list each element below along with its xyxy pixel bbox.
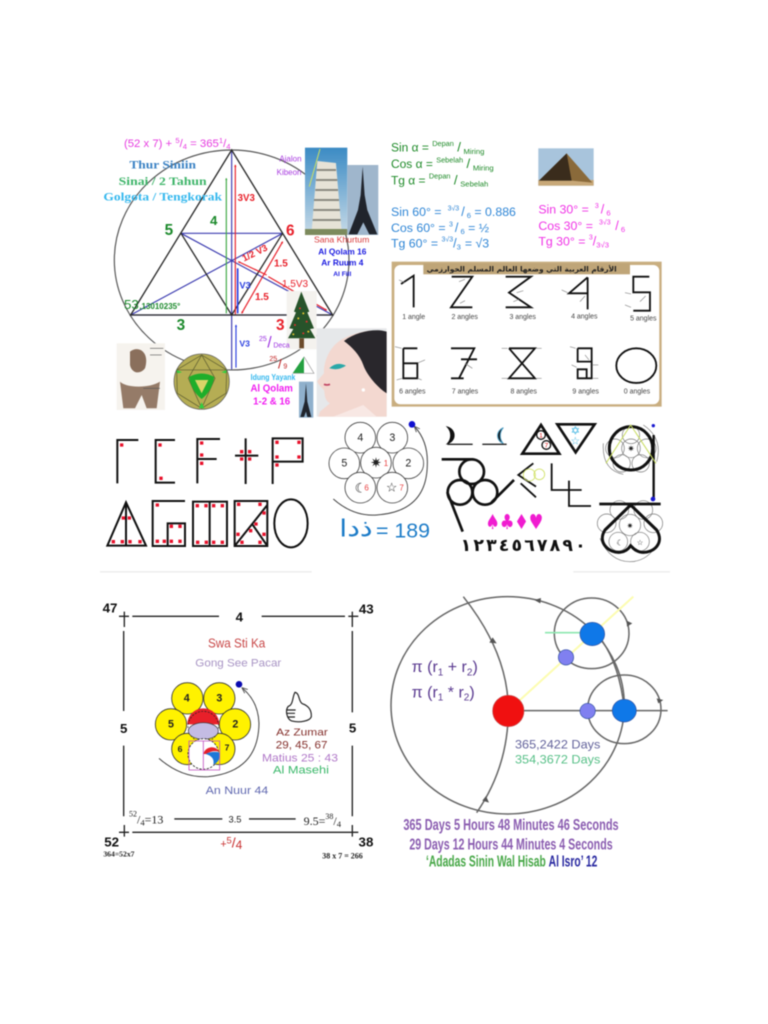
bottom formulas: =13	[145, 813, 163, 827]
text block: 60 degree values: Tg 60° =	[391, 236, 438, 250]
text block: 30 degree values: Cos 30° =	[538, 219, 593, 233]
labels: numbers on triangle: 4	[210, 213, 218, 228]
square frame	[119, 612, 358, 837]
heading: formula: /	[180, 138, 184, 150]
labels: numbers on triangle: 53	[124, 297, 139, 312]
bottom formulas: 38	[325, 812, 333, 821]
digit captions: 3 angles	[509, 314, 536, 321]
digit captions: 5 angles	[630, 316, 657, 323]
text block: 30 degree values: /	[593, 234, 597, 248]
bottom formulas: 364=52x7	[103, 850, 135, 859]
heading: formula: 1	[219, 136, 223, 145]
panel: orbital diagram	[391, 597, 668, 871]
text block: Deca fractions: /	[278, 356, 282, 371]
image: Christmas tree	[287, 291, 317, 349]
text block: Swa Sti Ka: Gong See Pacar	[195, 657, 282, 669]
labels: numbers on triangle: 1.5	[255, 292, 269, 303]
text block: green definitions: Depan	[429, 172, 451, 181]
heading: formula: /	[223, 138, 227, 150]
bottom formulas: 4	[236, 838, 243, 852]
text block: green definitions: Sebelah	[460, 180, 488, 189]
flower numbers: 1	[384, 459, 389, 468]
divider	[100, 571, 312, 573]
text block: durations: ‘Adadas Sinin Wal Hisab Al Isro’ 12	[426, 854, 597, 871]
measurement arrows	[226, 165, 327, 368]
flower numbers: 3	[216, 693, 222, 705]
chart title band: الأرقام العربية التي وضعها العالم المسلم الخوارزمي	[427, 264, 617, 273]
heading: formula: 4	[226, 142, 231, 151]
labels: numbers on triangle: 6	[286, 223, 295, 240]
flower numbers: 4	[184, 693, 190, 705]
flower numbers: ☆	[386, 481, 397, 495]
icon: triangles with symbols: ☆	[571, 434, 580, 447]
text block: Sana Khurtum: Al Fill	[333, 271, 352, 278]
formula text: pi: π (r	[412, 684, 438, 701]
corner and side numbers: 47	[103, 600, 117, 615]
text block: 60 degree values: /	[453, 236, 457, 250]
icon: triangles with symbols: 7	[544, 443, 548, 450]
formula text: pi: 1	[438, 667, 444, 678]
text block: Az Zumar, Matius, Al Masehi	[262, 728, 338, 777]
text block: Ajalon Kibeon: Ajalon	[279, 155, 302, 164]
text block: 60 degree values: Sin 60° =	[391, 205, 442, 219]
planets	[558, 622, 636, 722]
panel: trigonometry formulas	[391, 139, 662, 407]
corner and side numbers	[103, 600, 374, 849]
red dots	[112, 441, 301, 544]
text block: green definitions: Sin α =	[391, 141, 429, 155]
text block: 30 degree values: Sin 30° =	[538, 203, 589, 217]
text block: 30 degree values: Tg 30° =	[538, 234, 585, 248]
seal: heart shape	[597, 501, 663, 562]
formula text: pi: + r	[443, 659, 468, 676]
flower numbers: 7	[399, 483, 404, 492]
icon: seven-like circles glyph	[442, 459, 591, 532]
blue construction lines	[131, 150, 333, 369]
text block: 30 degree values: /	[615, 219, 619, 233]
digit captions: 8 angles	[510, 389, 537, 396]
text: An Nuur 44: An Nuur 44	[206, 785, 268, 797]
text block: green definitions: /	[466, 156, 470, 171]
orbits and lines	[391, 597, 668, 814]
text block: Idung Yayank Al Qolam: Al Qolam	[250, 384, 293, 395]
icon: crescent moons	[447, 427, 507, 444]
bottom formulas: 5	[227, 836, 232, 846]
text block: durations: 365 Days 5 Hours 48 Minutes 46 Seconds	[403, 817, 619, 834]
seal: heart shape: ☾	[616, 539, 624, 548]
panel: triangle in circle diagram	[103, 136, 387, 418]
circumscribed circle	[114, 150, 349, 370]
black triangle	[131, 150, 333, 315]
text block: Deca fractions: Deca	[273, 343, 290, 350]
digit glyphs	[401, 276, 656, 383]
bottom formulas	[103, 810, 363, 860]
formula: 189: = 189	[376, 519, 430, 542]
flower numbers: 2	[405, 458, 411, 470]
text block: green definitions: Tg α =	[391, 173, 426, 187]
icon: triangles with symbols: 1	[539, 433, 543, 440]
text block: Thur Sinin: Sinai / 2 Tahun	[119, 176, 207, 188]
formula text: pi: * r	[443, 684, 464, 701]
heading: formula: = 365	[187, 138, 219, 150]
text block: Deca fractions: 9	[283, 363, 287, 370]
icon: card suits: ♠♣♦♥	[485, 510, 543, 534]
text block: 30 degree values	[538, 203, 625, 249]
text block: Idung Yayank Al Qolam: Idung Yayank	[251, 373, 296, 382]
formula text: pi: 1	[438, 693, 444, 704]
text block: 30 degree values: 6	[621, 225, 625, 234]
text block: 30 degree values: 3	[589, 235, 593, 242]
text block: 60 degree values: = 0.886	[471, 205, 516, 219]
text block: Idung Yayank Al Qolam: 1-2 & 16	[253, 396, 291, 407]
icon: triangles with symbols	[522, 423, 595, 454]
text block: Idung Yayank Al Qolam	[250, 373, 296, 407]
text block: Az Zumar, Matius, Al Masehi: 29, 45, 67	[276, 739, 328, 751]
chart title band	[423, 263, 630, 274]
digit captions: 9 angles	[572, 389, 599, 396]
text block: 60 degree values: 6	[467, 211, 471, 220]
labels: numbers on triangle: ,13010235°	[139, 302, 180, 311]
labels: numbers on triangle: 1/2 V3	[240, 243, 269, 263]
text block: green definitions: Miring	[464, 147, 484, 156]
text block: Swa Sti Ka	[195, 637, 282, 669]
flower numbers: 6	[178, 744, 183, 754]
image: anatomy sketch	[117, 343, 165, 410]
flower of yellow circles	[155, 683, 251, 770]
flower numbers: 6	[364, 483, 369, 492]
text block: green definitions: Depan	[432, 139, 454, 148]
alignment lines	[508, 597, 633, 711]
text block: green definitions: Miring	[473, 163, 494, 172]
seal: nine shape	[603, 424, 658, 501]
formula text: pi: )	[472, 659, 478, 676]
flower numbers: ✷	[370, 454, 382, 470]
seal: heart shape: ✷	[627, 521, 634, 530]
image: pyramid	[538, 148, 594, 186]
digit captions: 7 angles	[452, 389, 479, 396]
formula text: pi: 2	[467, 667, 473, 678]
flower numbers: ☾	[355, 480, 367, 495]
formula: 189: ذدا	[339, 515, 373, 543]
icon: triangles with symbols: ✡	[571, 423, 580, 437]
flower of seven numbered circles	[329, 422, 424, 503]
icon: olive seal circle	[174, 354, 229, 409]
bottom formulas: 3.5	[229, 814, 241, 824]
text: Arabic numerals: ١٢٣٤٥٦٧٨٩٠	[461, 536, 586, 556]
labels: numbers on triangle: 3	[177, 317, 185, 334]
text block: Sana Khurtum: Al Qolam 16	[318, 246, 367, 256]
labels: numbers on triangle: 1.5	[274, 259, 288, 270]
heading: formula: (52 x 7) +	[124, 138, 172, 150]
icon: yellow-green circles	[523, 469, 545, 481]
sun: red circle	[493, 695, 524, 727]
text block: 60 degree values: = ½	[465, 221, 489, 235]
formula text: pi: )	[469, 684, 475, 701]
text block: Swa Sti Ka: Swa Sti Ka	[208, 637, 266, 651]
labels: numbers on triangle	[124, 193, 295, 349]
bottom formulas: 4	[140, 818, 145, 828]
text block: Deca fractions: /	[267, 335, 272, 352]
bottom formulas: 38 x 7 = 266	[322, 851, 363, 860]
text block: Sana Khurtum: Ar Ruum 4	[321, 258, 364, 268]
text block: Thur Sinin: Golgota / Tengkorak	[103, 192, 223, 204]
flower numbers: 2	[232, 718, 238, 730]
panel: Arabic numerals angles chart	[392, 262, 662, 407]
panel: triangle in circle diagram: 1.5V3	[282, 279, 309, 290]
formula text: pi: π (r	[412, 659, 438, 676]
bottom formulas: 4	[337, 819, 342, 829]
text block: days	[515, 738, 600, 767]
text block: Az Zumar, Matius, Al Masehi: Al Masehi	[273, 765, 329, 777]
text block: Sana Khurtum: Sana Khurtum	[314, 234, 369, 244]
text block: 60 degree values	[391, 204, 516, 251]
text block: Thur Sinin	[103, 157, 223, 204]
text block: 30 degree values: 3	[595, 203, 599, 210]
text block: 30 degree values: 6	[606, 209, 611, 218]
text block: 60 degree values: 3√3	[442, 236, 453, 244]
text block: 30 degree values: 3√3	[599, 218, 611, 226]
heading: formula: 4	[183, 142, 188, 151]
text block: green definitions: Sebelah	[436, 155, 463, 164]
bottom formulas: /	[232, 835, 236, 851]
digit captions: 6 angles	[399, 389, 426, 396]
text block: Sana Khurtum	[314, 234, 369, 278]
text block: 60 degree values: /	[455, 221, 459, 235]
flower numbers	[168, 693, 238, 754]
corner and side numbers: 52	[104, 834, 119, 849]
digit captions: 4 angles	[571, 314, 598, 321]
text block: days: 354,3672 Days	[515, 753, 600, 767]
text block: Ajalon Kibeon	[277, 155, 302, 177]
heading: formula: 5	[175, 136, 180, 145]
flower numbers: 5	[168, 719, 174, 731]
letter shapes	[107, 438, 308, 547]
bottom formulas: /	[137, 813, 140, 827]
image: Eiffel tower	[347, 165, 378, 235]
panel: symbols and seals	[442, 423, 670, 573]
flower numbers	[341, 432, 411, 495]
bottom formulas: /	[333, 814, 337, 828]
text block: 60 degree values: 6	[460, 227, 465, 236]
image: Pisa tower	[305, 148, 347, 235]
angle arrows	[395, 279, 646, 380]
flower numbers: 5	[341, 458, 347, 470]
panel: angular letter shapes with red dots	[100, 421, 430, 573]
labels: numbers on triangle: 5	[165, 222, 174, 239]
digit captions	[399, 314, 657, 396]
divider	[573, 571, 670, 573]
formula text: pi	[412, 659, 478, 704]
text block: 60 degree values: /	[461, 205, 465, 219]
text block: 60 degree values: 3	[457, 242, 461, 251]
text block: days: 365,2422 Days	[515, 738, 600, 752]
seal: nine shape: ✷	[627, 444, 635, 454]
text block: green definitions	[391, 139, 494, 189]
icon: thumbs up	[286, 692, 311, 722]
corner and side numbers: 5	[120, 721, 128, 736]
text block: green definitions: Cos α =	[391, 157, 433, 171]
formula: 189	[339, 515, 430, 543]
orbit arrow with blue dot	[333, 421, 427, 515]
image: small Eiffel tower	[299, 382, 313, 418]
text block: durations: 29 Days 12 Hours 44 Minutes 4 Seconds	[409, 836, 613, 853]
text block: green definitions: /	[454, 172, 458, 187]
text block: 60 degree values: 3√3	[448, 204, 459, 212]
formula text: pi: 2	[464, 693, 470, 704]
text block: Deca fractions	[259, 335, 290, 371]
text block: Deca fractions: 25	[259, 336, 267, 343]
bottom formulas: +	[220, 839, 227, 851]
text block: durations	[403, 817, 619, 871]
seal: heart shape: ☆	[637, 538, 644, 547]
text block: 30 degree values: 3√3	[596, 240, 609, 249]
labels: numbers on triangle: V3	[239, 280, 251, 290]
digit captions: 1 angle	[402, 314, 425, 321]
text block: 30 degree values: /	[601, 203, 605, 217]
text block: 60 degree values: Cos 60° =	[391, 221, 446, 235]
flower numbers: 3	[389, 432, 395, 444]
corner and side numbers: 43	[359, 602, 374, 617]
flower numbers: 4	[357, 432, 363, 444]
digit captions: 2 angles	[451, 314, 478, 321]
corner and side numbers: 38	[359, 834, 373, 849]
text block: green definitions: /	[457, 140, 461, 155]
image: woman profile	[317, 328, 387, 417]
labels: numbers on triangle: 3V3	[238, 193, 255, 204]
labels: numbers on triangle: V3	[239, 339, 250, 349]
text block: Az Zumar, Matius, Al Masehi: Az Zumar	[276, 728, 329, 739]
text block: Ajalon Kibeon: Kibeon	[277, 168, 302, 177]
bottom formulas: 9.5=	[304, 814, 325, 828]
orbit arrows	[482, 598, 663, 803]
icon: small green triangle	[293, 357, 314, 373]
text block: Thur Sinin: Thur Siniin	[129, 157, 196, 171]
text block: Deca fractions: 25	[269, 356, 277, 363]
text block: 60 degree values: = √3	[465, 236, 489, 250]
corner and side numbers: 4	[236, 610, 244, 625]
text block: Az Zumar, Matius, Al Masehi: Matius 25 : 43	[262, 752, 338, 764]
bottom formulas: 52	[129, 810, 137, 819]
flower numbers: 7	[225, 743, 230, 753]
digit captions: 0 angles	[624, 389, 651, 396]
corner and side numbers: 5	[349, 720, 357, 735]
text block: 60 degree values: 3	[449, 221, 453, 228]
labels: numbers on triangle: 3	[276, 317, 285, 334]
panel: square with corner numbers and flower	[103, 600, 374, 860]
orbit arrow with blue dot	[159, 681, 259, 777]
